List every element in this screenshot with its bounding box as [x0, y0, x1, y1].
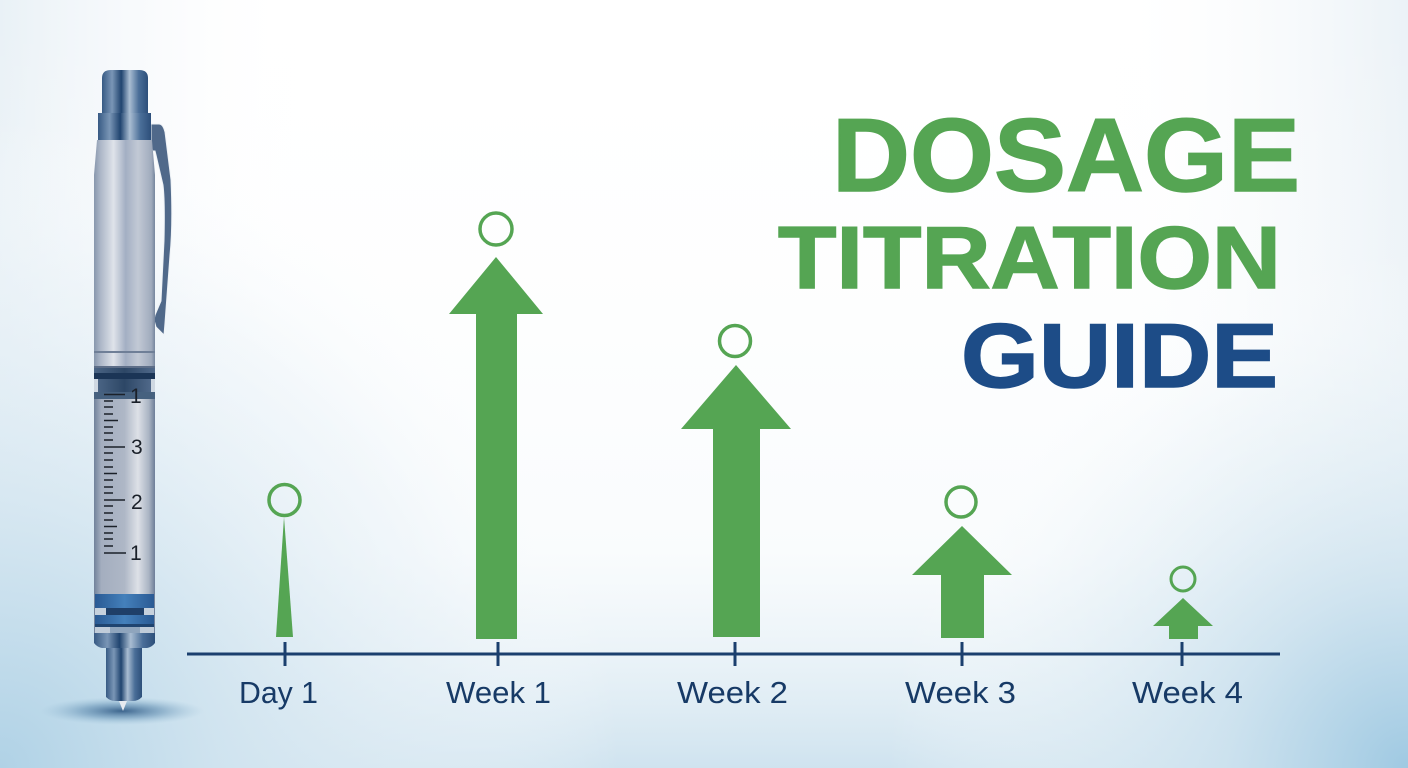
timeline labels	[239, 675, 1243, 710]
pen cap button	[102, 70, 148, 113]
dose numbers	[130, 385, 143, 565]
Week 3 marker	[946, 487, 976, 517]
timeline labels: Week 3	[905, 675, 1016, 710]
pen injector illustration	[40, 70, 204, 725]
pen collar	[98, 113, 151, 140]
Week 4 arrow	[1153, 598, 1213, 639]
dose numbers: 1	[130, 542, 142, 565]
Week 2 arrow	[681, 365, 791, 637]
Day 1 arrow	[276, 517, 293, 637]
title line: DOSAGE: DOSAGE	[832, 98, 1300, 214]
Day 1 marker	[269, 484, 300, 516]
pen clip	[151, 124, 172, 335]
timeline labels: Week 4	[1132, 675, 1243, 710]
dark ring	[94, 368, 155, 379]
timeline labels: Week 1	[446, 675, 551, 710]
timeline axis	[187, 642, 1280, 666]
needle tip	[119, 701, 127, 711]
pen base	[94, 633, 155, 648]
dose scale	[104, 394, 126, 553]
blue lower bands	[94, 585, 155, 633]
Week 4 marker	[1171, 567, 1195, 591]
plunger	[94, 379, 155, 399]
needle hub	[106, 648, 142, 701]
Week 1 arrow	[449, 257, 543, 639]
Week 2 marker	[720, 326, 750, 356]
dose numbers: 3	[131, 436, 143, 459]
title line: TITRATION: TITRATION	[778, 208, 1281, 307]
timeline labels: Day 1	[239, 675, 318, 710]
timeline labels: Week 2	[677, 675, 788, 710]
title	[778, 98, 1300, 407]
title line: GUIDE: GUIDE	[961, 306, 1278, 407]
dosage chart	[187, 213, 1280, 710]
pen upper body	[94, 140, 155, 352]
cartridge window	[94, 379, 155, 643]
pen shadow	[40, 697, 204, 725]
pen metal band	[94, 350, 155, 369]
dose numbers: 2	[131, 491, 143, 514]
Week 3 arrow	[912, 526, 1012, 638]
dose numbers: 1	[130, 385, 142, 408]
Week 1 marker	[480, 213, 512, 245]
